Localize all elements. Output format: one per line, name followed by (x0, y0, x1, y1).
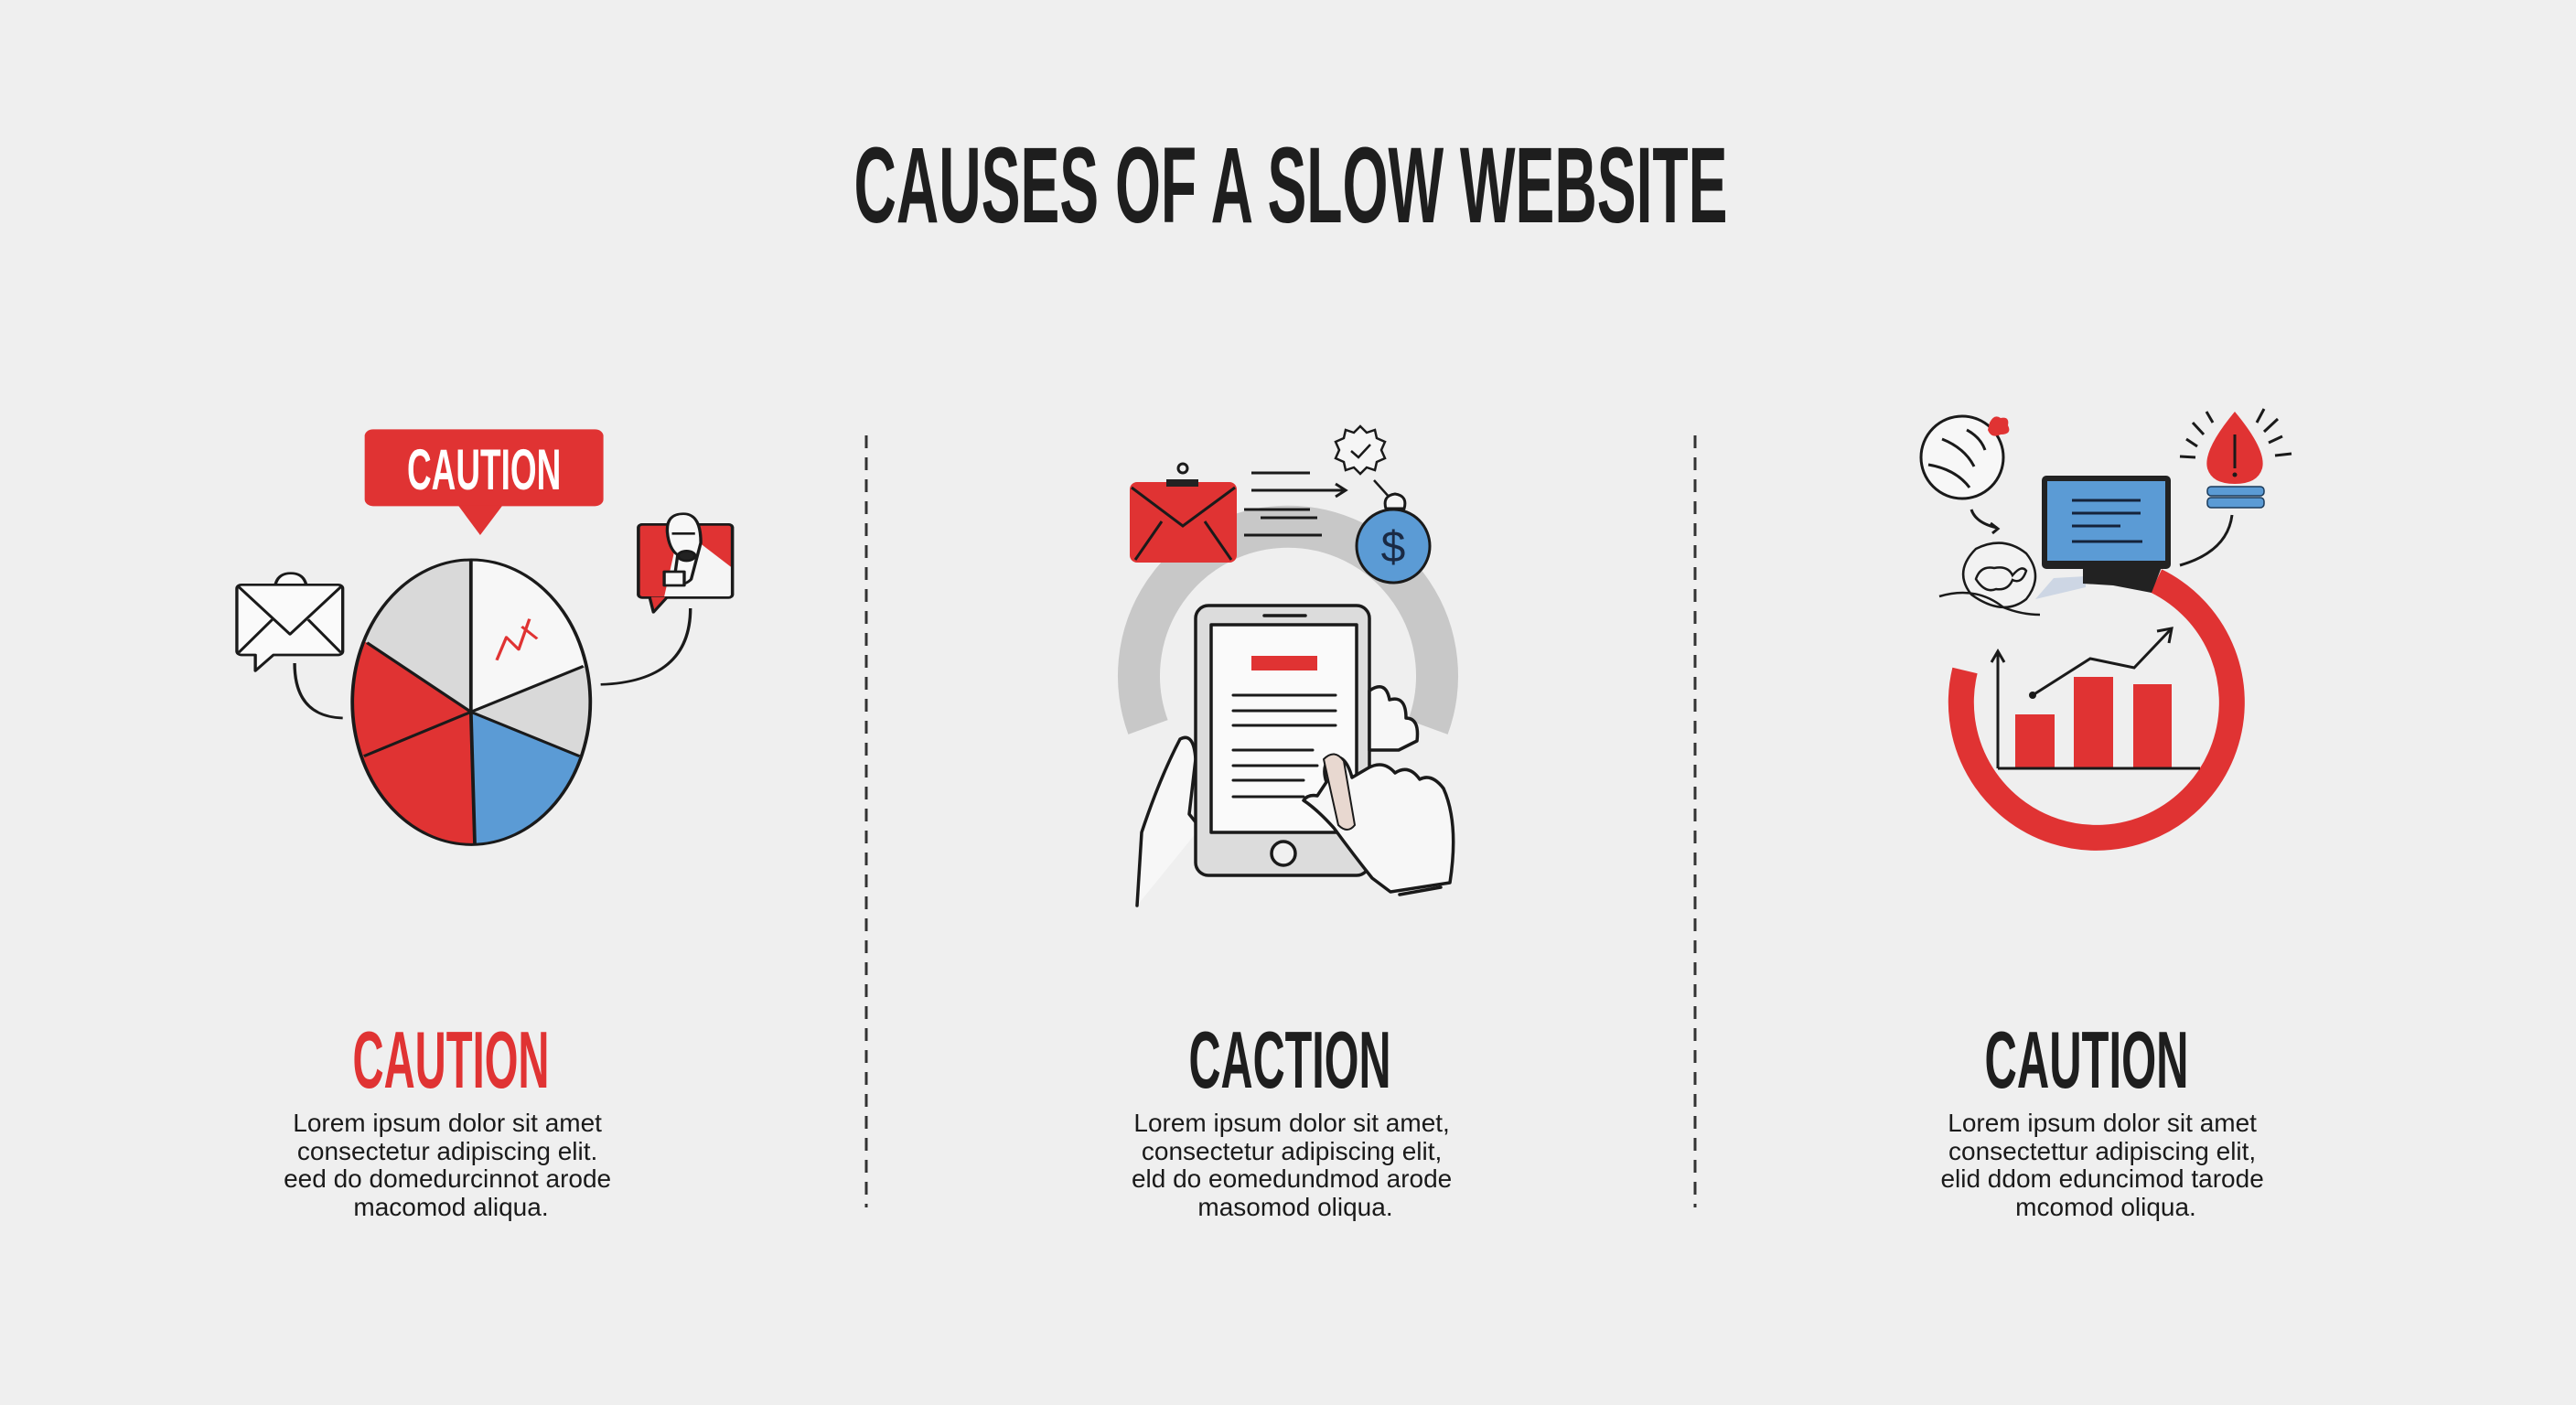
text block: macomod aliqua. (353, 1193, 549, 1221)
icon: badge check (1336, 426, 1390, 499)
heading: caution: CAUTION (353, 1014, 549, 1105)
icon: money bag: $ (1381, 523, 1405, 572)
icon: tablet with hands (1137, 606, 1454, 906)
text block: eld do eomedundmod arode (1132, 1164, 1452, 1193)
icon: caution bubble (365, 429, 604, 535)
heading: caction: CACTION (1189, 1014, 1390, 1105)
title: CAUSES OF A SLOW WEBSITE (854, 125, 1727, 246)
icon: speed lines arrow (1244, 473, 1346, 535)
text block: Lorem ipsum dolor sit amet (293, 1109, 602, 1137)
icon: monitor (2035, 476, 2171, 599)
icon: alert person box (601, 514, 733, 684)
icon: sketch bubble (1939, 543, 2040, 615)
panel: causes 3 (1921, 409, 2292, 1221)
text block: mcomod oliqua. (2015, 1193, 2196, 1221)
icon: bar chart (1991, 628, 2200, 768)
panel: causes 1 (237, 429, 733, 1221)
text block: eed do domedurcinnot arode (284, 1164, 611, 1193)
text block: consectetur adipiscing elit. (297, 1137, 597, 1165)
panel: causes 2 (1130, 426, 1459, 1221)
icon: ball (1921, 416, 2009, 533)
heading: caution: CAUTION (1985, 1014, 2188, 1105)
icon: gray gauge arc (1139, 527, 1437, 727)
text block: consectettur adipiscing elit, (1948, 1137, 2256, 1165)
icon: pie chart (350, 558, 593, 846)
icon group: panel 1 illustration (237, 429, 733, 872)
text block: Lorem ipsum dolor sit amet (1948, 1109, 2257, 1137)
text block: consectetur adipiscing elit, (1142, 1137, 1442, 1165)
icon: flame alert (2180, 409, 2292, 565)
text block: Lorem ipsum dolor sit amet, (1133, 1109, 1450, 1137)
icon: money bag (1357, 494, 1430, 583)
text block: masomod oliqua. (1197, 1193, 1393, 1221)
icon: red ring (1961, 581, 2232, 838)
text block: elid ddom eduncimod tarode (1940, 1164, 2264, 1193)
icon: red envelope (1130, 464, 1237, 563)
icon: caution bubble: CAUTION (407, 438, 561, 502)
icon: envelope (237, 574, 343, 718)
